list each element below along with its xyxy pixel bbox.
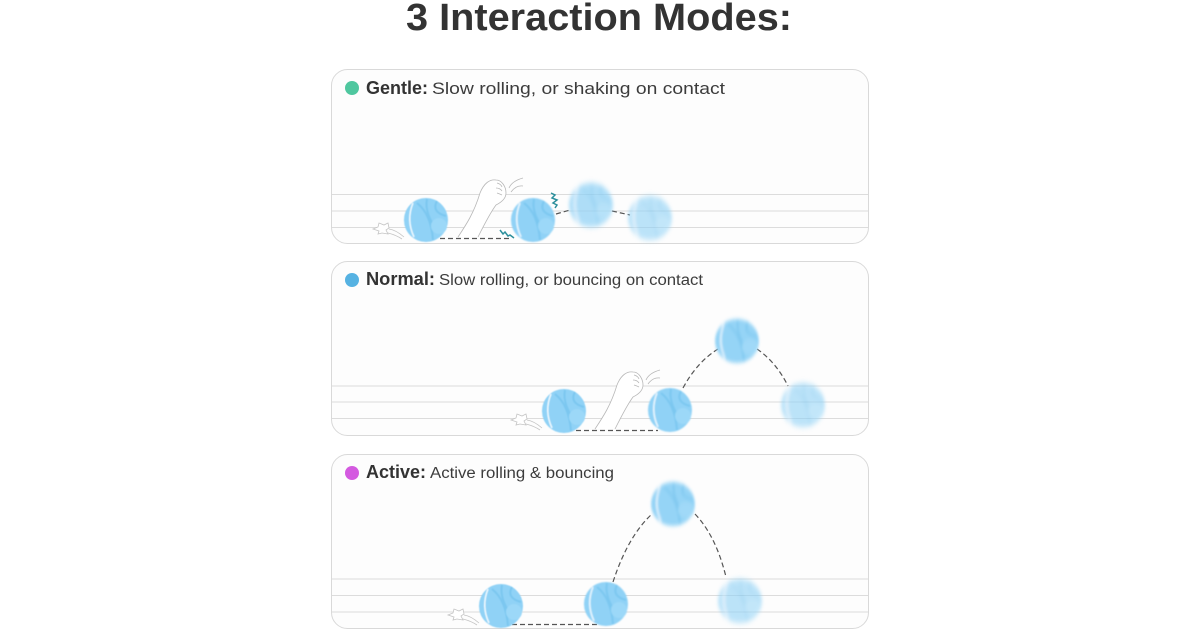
active status dot (345, 466, 359, 480)
icon: ball landing (718, 579, 762, 623)
active heading: Active: (366, 462, 426, 482)
icon: blurred ball landing (628, 196, 672, 240)
icon: ball rolling (584, 582, 628, 626)
panel: active (332, 454, 868, 628)
normal description: Slow rolling, or bouncing on contact (439, 272, 704, 289)
panel: normal (332, 262, 868, 436)
icon: shake marks (500, 193, 557, 238)
normal heading: Normal: (366, 269, 435, 289)
icon: ball shaking (511, 198, 555, 242)
gentle description: Slow rolling, or shaking on contact (432, 79, 725, 98)
icon: ball on contact (648, 388, 692, 432)
icon: ball landing (781, 383, 825, 427)
icon: cat paw (458, 178, 523, 237)
panel: gentle (332, 70, 868, 244)
normal trajectory (576, 349, 788, 430)
icon: cat tail (448, 609, 479, 625)
active description: Active rolling & bouncing (430, 465, 614, 482)
icon: cat paw (595, 370, 660, 429)
icon: ball at peak (651, 482, 695, 526)
normal status dot (345, 273, 359, 287)
gentle heading: Gentle: (366, 78, 428, 98)
icon: ball at rest (404, 198, 448, 242)
icon: cat tail (373, 223, 404, 239)
icon: ball at rest (479, 584, 523, 628)
icon: blurred ball high (569, 183, 613, 227)
active trajectory (512, 514, 726, 624)
gentle status dot (345, 81, 359, 95)
icon: ball at peak (715, 319, 759, 363)
icon: cat tail (511, 414, 542, 430)
gentle trajectory (440, 210, 630, 238)
icon: ball at rest (542, 389, 586, 433)
